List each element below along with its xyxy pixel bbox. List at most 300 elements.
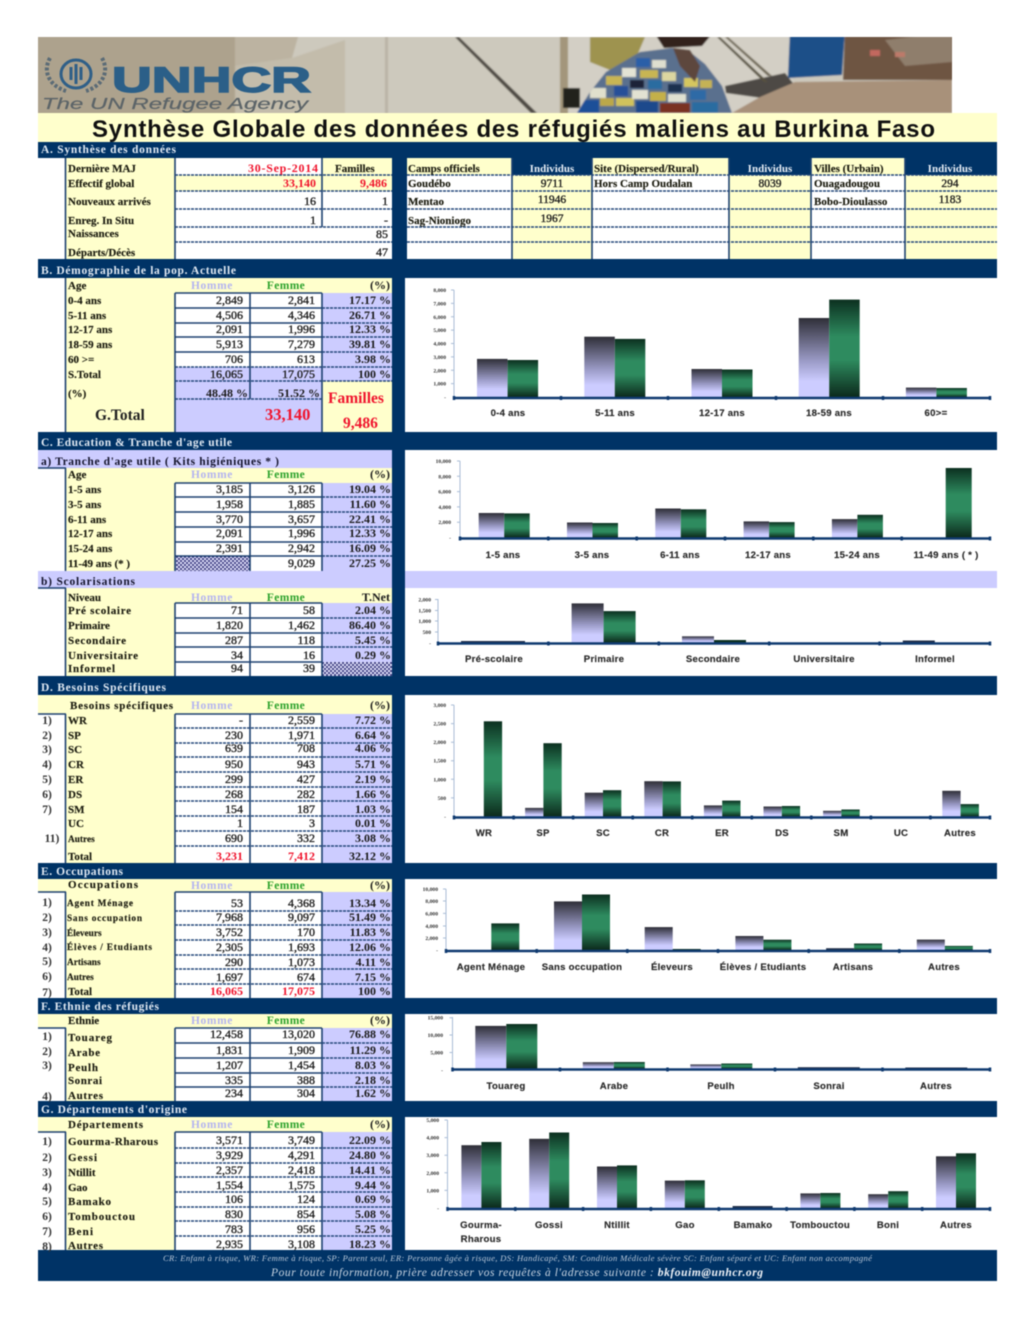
table: tranche d'age utile: 3,126: [288, 482, 315, 496]
table: demography by age: 2,849: [216, 293, 243, 307]
table: summary figures: 33,140: [283, 176, 316, 190]
category labels: 11-49 ans ( * ): [913, 550, 979, 561]
table: besoins spécifiques: 282: [297, 787, 315, 801]
subheading b: [38, 571, 392, 588]
table: demography by age: 9,486: [343, 415, 378, 432]
table: départements: 24.80 %: [349, 1148, 391, 1162]
table: besoins spécifiques: 690: [225, 831, 243, 845]
table: besoins spécifiques: 7.72 %: [355, 713, 391, 727]
table: ethnie: Femme: [267, 1015, 305, 1027]
bars: [461, 603, 935, 642]
y axis: 1,500: [433, 759, 446, 765]
table: départements: Tombouctou: [68, 1211, 135, 1223]
y axis: 1,000: [426, 1188, 439, 1194]
table: occupations: Femme: [267, 880, 305, 892]
y axis: 2,500: [433, 722, 446, 728]
table: occupations: Homme: [191, 880, 233, 892]
table: occupations: 7.15 %: [355, 970, 391, 984]
table: tranche d'age utile: 27.25 %: [349, 556, 391, 570]
table: départements: 14.41 %: [349, 1163, 391, 1177]
table: sites and individuals: 1967: [540, 213, 564, 225]
table: occupations: 7,968: [216, 910, 243, 924]
category labels: Sonrai: [813, 1081, 845, 1092]
table: occupations: 1,697: [216, 970, 243, 984]
table: tranche d'age utile: 1,996: [288, 526, 315, 540]
category labels: Peulh: [707, 1081, 735, 1092]
table: sites and individuals: 8039: [758, 178, 782, 190]
y axis: [418, 598, 438, 647]
table: départements: 6): [42, 1211, 52, 1223]
category labels: ER: [715, 828, 729, 839]
table: demography by age: 12.33 %: [349, 322, 391, 336]
table: scolarisations: Niveau: [68, 592, 101, 604]
table: besoins spécifiques: 639: [225, 741, 243, 755]
table: ethnie: [38, 1013, 392, 1103]
table: ethnie: (%): [370, 1013, 390, 1027]
table: tranche d'age utile: 1-5 ans: [68, 484, 102, 496]
table: besoins spécifiques: 1): [42, 715, 52, 727]
table: besoins spécifiques: [38, 695, 392, 863]
table: occupations: 5): [42, 956, 52, 968]
table: ethnie: 335: [225, 1073, 243, 1087]
y axis: 4,000: [433, 342, 446, 348]
table: ethnie: Autres: [68, 1090, 104, 1102]
table: départements: 5): [42, 1196, 52, 1208]
table: summary figures: Naissances: [68, 228, 119, 240]
table: sites and individuals: Ouagadougou: [814, 178, 880, 190]
table: demography by age: Homme: [191, 280, 233, 292]
table: demography by age: 33,140: [265, 405, 310, 424]
category labels: Boni: [877, 1220, 899, 1231]
table: besoins spécifiques: 1.03 %: [355, 802, 391, 816]
table: occupations: 4): [42, 942, 52, 954]
panel: D. Besoins Spécifiques: [38, 682, 990, 863]
table: demography by age: 51.52 %: [278, 386, 320, 400]
title: Synthèse Globale des données des réfugiés maliens au Burkina Faso: [92, 116, 935, 143]
table: summary figures: 1: [310, 213, 316, 227]
table: occupations: 2,305: [216, 940, 243, 954]
table: besoins spécifiques: 3.08 %: [355, 831, 391, 845]
y axis: 5,000: [433, 328, 446, 334]
table: summary figures: Enreg. In Situ: [68, 215, 134, 227]
y axis: 8,000: [425, 899, 438, 905]
table: occupations: 4,368: [288, 896, 315, 910]
table: tranche d'age utile: 15-24 ans: [68, 543, 113, 555]
table: besoins spécifiques: 230: [225, 728, 243, 742]
table: scolarisations: 16: [303, 648, 315, 662]
table: scolarisations: Universitaire: [68, 650, 138, 662]
table: ethnie: 12,458: [210, 1027, 243, 1041]
table: besoins spécifiques: 6): [42, 789, 52, 801]
table: occupations: 6): [42, 971, 52, 983]
table: besoins spécifiques: 7,412: [288, 849, 315, 863]
table: scolarisations: 1,820: [216, 618, 243, 632]
table: scolarisations: 287: [225, 633, 243, 647]
table: sites and individuals: 9711: [541, 178, 564, 190]
bars: [475, 1024, 967, 1068]
table: tranche d'age utile: 2,391: [216, 541, 243, 555]
table: besoins spécifiques: 3): [42, 744, 52, 756]
table: besoins spécifiques: ER: [68, 774, 84, 786]
table: besoins spécifiques: SM: [68, 804, 85, 816]
table: départements: 0.69 %: [355, 1192, 391, 1206]
panel: C. Education & Tranche d'age utile: [38, 437, 990, 676]
table: occupations: 12.06 %: [349, 940, 391, 954]
bars: [491, 894, 973, 950]
table: besoins spécifiques: 4.06 %: [355, 741, 391, 755]
y axis: 500: [438, 796, 446, 802]
table: besoins spécifiques: 299: [225, 772, 243, 786]
y axis: -: [444, 395, 446, 401]
y axis: 2,000: [425, 936, 438, 942]
table: besoins spécifiques: 0.01 %: [355, 816, 391, 830]
category labels: [460, 1220, 972, 1245]
y axis: 4,000: [438, 505, 451, 511]
table: ethnie: 1,909: [288, 1043, 315, 1057]
y axis: 6,000: [425, 911, 438, 917]
y axis: 3,000: [433, 703, 446, 709]
table: départements: 4,291: [288, 1148, 315, 1162]
table: occupations: 51.49 %: [349, 910, 391, 924]
table: demography by age: 39.81 %: [349, 337, 391, 351]
category labels: 12-17 ans: [699, 408, 745, 419]
table: besoins spécifiques: 4): [42, 759, 52, 771]
table: départements: 9.44 %: [355, 1178, 391, 1192]
y axis: [428, 1016, 452, 1074]
y axis: -: [444, 814, 446, 820]
table: sites and individuals: Individus: [748, 163, 793, 175]
table: scolarisations: Informel: [68, 663, 115, 675]
table: ethnie: 1.62 %: [355, 1086, 391, 1100]
table: départements: Gessi: [68, 1152, 97, 1164]
category labels: Pré-scolaire: [465, 654, 523, 665]
table: occupations: Sans occupation: [67, 914, 143, 924]
table: scolarisations: 1,462: [288, 618, 315, 632]
category labels: Sans occupation: [542, 962, 622, 973]
table: ethnie: 8.03 %: [355, 1058, 391, 1072]
table: tranche d'age utile: 2,942: [288, 541, 315, 555]
category labels: Autres: [920, 1081, 952, 1092]
table: besoins spécifiques: 3: [309, 816, 315, 830]
category labels: Ntillit: [604, 1220, 630, 1231]
table: tranche d'age utile: Femme: [267, 469, 305, 481]
table: summary figures: 85: [376, 227, 388, 241]
table: sites and individuals: 1183: [939, 194, 962, 206]
table: tranche d'age utile: [38, 467, 392, 571]
table: occupations: 11.83 %: [350, 925, 391, 939]
table: occupations: 7): [42, 987, 52, 999]
heading F: F. Ethnie des réfugiés: [41, 1001, 160, 1013]
table: sites and individuals: [407, 158, 997, 259]
bars: [461, 1132, 976, 1208]
y axis: 5,000: [430, 1050, 443, 1056]
category labels: WR: [476, 828, 492, 839]
table: tranche d'age utile: 1,885: [288, 497, 315, 511]
contact line: Pour toute information, prière adresser vos requêtes à l'adresse suivante : bkfouim@unhcr.org: [270, 1267, 763, 1279]
table: occupations: 100 %: [358, 984, 391, 998]
table: occupations: Occupations: [68, 879, 139, 891]
table: occupations: 4.11 %: [356, 955, 391, 969]
table: tranche d'age utile: Age: [68, 469, 86, 481]
table: demography by age: Familles: [328, 390, 384, 407]
table: summary figures: Effectif global: [68, 178, 134, 190]
table: besoins spécifiques: WR: [68, 715, 88, 727]
table: départements: Gao: [68, 1182, 88, 1194]
table: départements: 854: [297, 1207, 315, 1221]
table: tranche d'age utile: 6-11 ans: [68, 514, 107, 526]
table: demography by age: S.Total: [68, 369, 101, 381]
table: summary figures: 9,486: [360, 176, 387, 190]
table: sites and individuals: Hors Camp Oudalan: [594, 178, 692, 190]
table: tranche d'age utile: 11.60 %: [350, 497, 391, 511]
category labels: 1-5 ans: [486, 550, 520, 561]
table: summary figures: 47: [376, 245, 388, 259]
table: demography by age: 18-59 ans: [68, 339, 113, 351]
table: départements: 4): [42, 1182, 52, 1194]
table: summary figures: Dernière MAJ: [68, 163, 136, 175]
table: demography by age: 2,091: [216, 322, 243, 336]
y axis: 1,000: [418, 619, 431, 625]
table: départements: 22.09 %: [349, 1133, 391, 1147]
table: besoins spécifiques: Homme: [191, 700, 233, 712]
y axis: 3,000: [433, 355, 446, 361]
table: départements: 3,108: [288, 1237, 315, 1251]
table: départements: Ntillit: [68, 1167, 96, 1179]
footer: legend and contact: [163, 1253, 873, 1279]
table: occupations: 1): [42, 897, 52, 909]
table: ethnie: Sonrai: [68, 1075, 102, 1087]
table: sites and individuals: Site (Dispersed/Rural): [594, 163, 699, 175]
y axis: 5,000: [426, 1118, 439, 1124]
table: départements: 783: [225, 1222, 243, 1236]
table: scolarisations: 58: [303, 603, 315, 617]
table: sites and individuals: Bobo-Dioulasso: [814, 196, 888, 208]
table: occupations: 9,097: [288, 910, 315, 924]
table: tranche d'age utile: 12-17 ans: [68, 528, 113, 540]
table: demography by age: 48.48 %: [206, 386, 248, 400]
table: besoins spécifiques: 1.66 %: [355, 787, 391, 801]
table: scolarisations: 39: [303, 661, 315, 675]
category labels: Tombouctou: [790, 1220, 850, 1231]
table: départements: Femme: [267, 1119, 305, 1131]
table: départements: 3,929: [216, 1148, 243, 1162]
heading G: G. Départements d'origine: [41, 1104, 187, 1116]
table: ethnie: 234: [225, 1086, 243, 1100]
table: summary figures: 16: [304, 194, 316, 208]
category labels: [465, 654, 955, 665]
table: ethnie: Ethnie: [68, 1015, 99, 1027]
table: summary figures: 30-Sep-2014: [248, 161, 318, 175]
table: ethnie: 76.88 %: [349, 1027, 391, 1041]
category labels: Autres: [940, 1220, 972, 1231]
table: départements: Gourma-Rharous: [68, 1136, 159, 1148]
table: summary figures: [38, 158, 392, 259]
table: départements: Autres: [68, 1240, 104, 1252]
subheading a: a) Tranche d'age utile ( Kits higiéniques * ): [41, 456, 279, 468]
table: besoins spécifiques: 1: [237, 816, 243, 830]
y axis: 4,000: [426, 1136, 439, 1142]
table: demography by age: 3.98 %: [355, 352, 391, 366]
table: occupations: 13.34 %: [349, 896, 391, 910]
table: demography by age: 7,279: [288, 337, 315, 351]
table: scolarisations: [38, 588, 392, 676]
table: demography by age: 4,346: [288, 308, 315, 322]
y axis: [433, 703, 454, 820]
table: tranche d'age utile: 9,029: [288, 556, 315, 570]
category labels: Gourma-: [460, 1220, 502, 1231]
heading A: A. Synthèse des données: [41, 144, 177, 156]
table: besoins spécifiques: 11): [45, 833, 60, 845]
table: ethnie: 2.18 %: [355, 1073, 391, 1087]
table: tranche d'age utile: 2,091: [216, 526, 243, 540]
bars: [479, 468, 972, 538]
table: départements: 3): [42, 1167, 52, 1179]
table: scolarisations: 0.29 %: [355, 648, 391, 662]
table: besoins spécifiques: Autres: [68, 835, 95, 845]
table: demography by age: 17,075: [282, 367, 315, 381]
heading B: B. Démographie de la pop. Actuelle: [41, 265, 236, 277]
table: ethnie: 3): [42, 1060, 52, 1072]
y axis: 2,000: [418, 598, 431, 604]
y axis: -: [437, 1206, 439, 1212]
category labels: SP: [536, 828, 550, 839]
category labels: Universitaire: [793, 654, 855, 665]
y axis: 1,000: [433, 382, 446, 388]
table: besoins spécifiques: 1,971: [288, 728, 315, 742]
table: demography by age: 60 >=: [68, 354, 94, 366]
table: occupations: (%): [370, 878, 390, 892]
table: sites and individuals: Camps officiels: [408, 163, 481, 175]
table: sites and individuals: Villes (Urbain): [814, 163, 884, 175]
table: besoins spécifiques: 2,559: [288, 713, 315, 727]
category labels: [476, 828, 976, 839]
table: occupations: 290: [225, 955, 243, 969]
y axis: 1,500: [418, 608, 431, 614]
table: demography by age: 4,506: [216, 308, 243, 322]
table: occupations: 1,073: [288, 955, 315, 969]
table: besoins spécifiques: 6.64 %: [355, 728, 391, 742]
category labels: SM: [834, 828, 848, 839]
category labels: 60>=: [925, 408, 948, 419]
table: scolarisations: Pré scolaire: [68, 605, 131, 617]
category labels: 0-4 ans: [491, 408, 525, 419]
category labels: Informel: [915, 654, 955, 665]
table: summary figures: Familles: [335, 163, 375, 175]
panel: A. Synthèse des données: [38, 144, 997, 259]
y axis: -: [449, 536, 451, 542]
table: départements: 5.08 %: [355, 1207, 391, 1221]
table: scolarisations: Homme: [191, 592, 233, 604]
table: ethnie: 1,207: [216, 1058, 243, 1072]
category labels: 6-11 ans: [660, 550, 700, 561]
table: occupations: 674: [297, 970, 315, 984]
bars: [484, 721, 979, 816]
y axis: [436, 459, 460, 542]
table: summary figures: Départs/Décès: [68, 247, 136, 259]
table: ethnie: 1): [42, 1031, 52, 1043]
bar chart: tranche d'age utile: [436, 459, 990, 561]
table: besoins spécifiques: 2.19 %: [355, 772, 391, 786]
table: demography by age: 2,841: [288, 293, 315, 307]
table: demography by age: Femme: [267, 280, 305, 292]
category labels: 3-5 ans: [575, 550, 609, 561]
table: occupations: 16,065: [210, 984, 243, 998]
table: demography by age: 0-4 ans: [68, 295, 102, 307]
panel: B. Démographie: [38, 265, 990, 432]
table: demography by age: 100 %: [358, 367, 391, 381]
y axis: 8,000: [433, 288, 446, 294]
table: départements: 956: [297, 1222, 315, 1236]
y axis: 10,000: [436, 459, 451, 465]
table: départements: 3,749: [288, 1133, 315, 1147]
table: occupations: Autres: [67, 973, 94, 983]
table: besoins spécifiques: 187: [297, 802, 315, 816]
table: départements: 830: [225, 1207, 243, 1221]
category labels: SC: [596, 828, 610, 839]
table: besoins spécifiques: (%): [370, 698, 390, 712]
table: scolarisations: 2.04 %: [355, 603, 391, 617]
table: occupations: 3): [42, 927, 52, 939]
table: occupations: Total: [68, 986, 92, 998]
y axis: 4,000: [425, 924, 438, 930]
panel: E. Occupations: [38, 866, 990, 999]
y axis: 6,000: [433, 315, 446, 321]
table: scolarisations: Secondaire: [68, 635, 126, 647]
table: départements: 2,357: [216, 1163, 243, 1177]
y axis: 1,000: [433, 777, 446, 783]
table: demography by age: 613: [297, 352, 315, 366]
table: tranche d'age utile: (%): [370, 467, 390, 481]
table: besoins spécifiques: 332: [297, 831, 315, 845]
table: départements: 1,575: [288, 1178, 315, 1192]
category labels: Touareg: [487, 1081, 525, 1092]
table: occupations: Élèves / Etudiants: [67, 941, 152, 953]
heading D: D. Besoins Spécifiques: [41, 682, 167, 694]
table: besoins spécifiques: Total: [68, 851, 92, 863]
y axis: 500: [423, 630, 431, 636]
table: sites and individuals: 11946: [538, 194, 566, 206]
table: demography by age: G.Total: [95, 407, 146, 424]
table: ethnie: 2): [42, 1046, 52, 1058]
category labels: Agent Ménage: [457, 962, 525, 973]
table: départements: 8): [42, 1241, 52, 1253]
table: demography by age: 1,996: [288, 322, 315, 336]
table: occupations: 17,075: [282, 984, 315, 998]
table: départements: 124: [297, 1192, 315, 1206]
table: scolarisations: 86.40 %: [349, 618, 391, 632]
table: ethnie: Peulh: [68, 1062, 98, 1074]
category labels: [457, 961, 960, 973]
table: tranche d'age utile: 3-5 ans: [68, 499, 102, 511]
table: départements: 1,554: [216, 1178, 243, 1192]
table: départements: [38, 1117, 392, 1253]
table: besoins spécifiques: Femme: [267, 700, 305, 712]
y axis: 7,000: [433, 301, 446, 307]
table: départements: 1): [42, 1136, 52, 1148]
table: départements: 5.25 %: [355, 1222, 391, 1236]
category labels: [491, 408, 948, 419]
table: demography by age: Age: [68, 280, 86, 292]
table: besoins spécifiques: 950: [225, 757, 243, 771]
category labels: 15-24 ans: [834, 550, 880, 561]
subheading b: b) Scolarisations: [41, 576, 136, 588]
category labels: Arabe: [600, 1081, 628, 1092]
category labels: Primaire: [584, 654, 624, 665]
table: scolarisations: 71: [231, 603, 243, 617]
table: tranche d'age utile: 22.41 %: [349, 512, 391, 526]
table: demography by age: (%): [370, 278, 390, 292]
y axis: -: [436, 948, 438, 954]
